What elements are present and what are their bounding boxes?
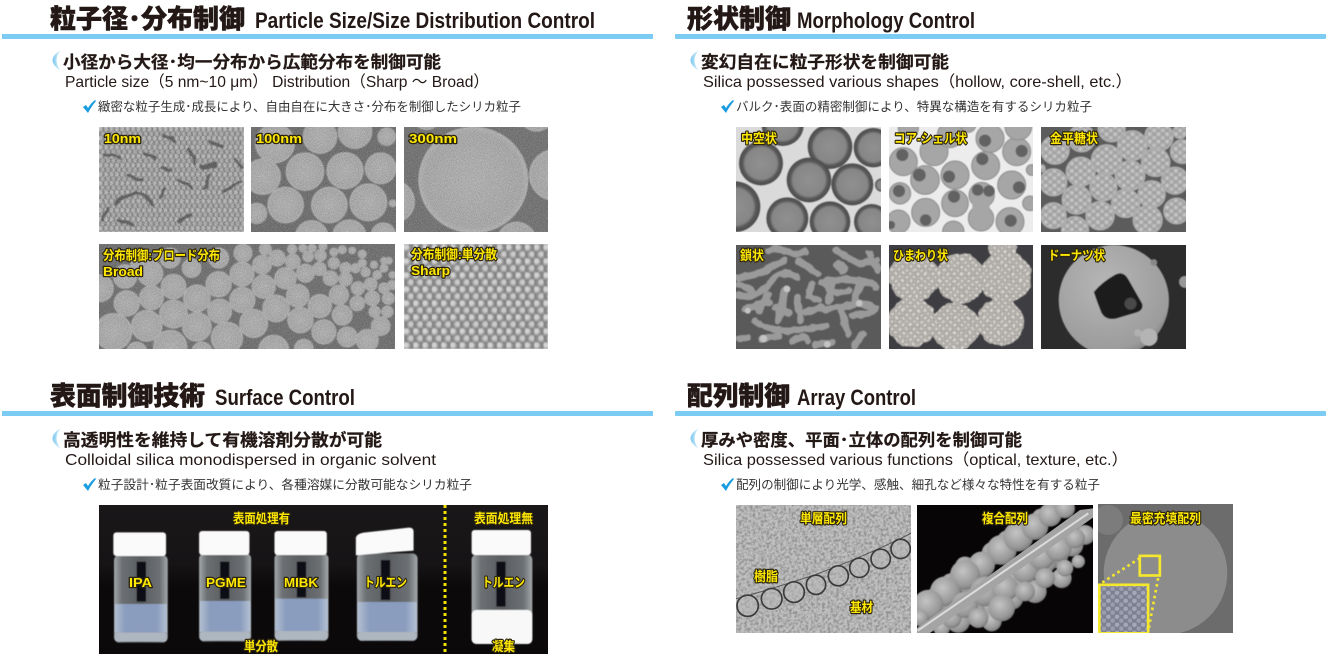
photo: solvent vials: [99, 505, 548, 654]
micrograph: 100nm: [244, 114, 397, 254]
micrograph: 300nm: 300nm: [409, 131, 457, 146]
photo: solvent vials: トルエン: [482, 575, 525, 590]
subheading: array control: 厚みや密度、平面･立体の配列を制御可能: [701, 430, 1022, 450]
micrograph: broad distribution: [87, 242, 397, 365]
micrograph: sunflower: [888, 233, 1033, 351]
check note: surface control: 粒子設計･粒子表面改質により、各種溶媒に分散可能なシリカ粒子: [98, 477, 472, 492]
micrograph: donut: ドーナツ状: [1048, 248, 1105, 263]
photo: solvent vials: トルエン: [364, 575, 407, 590]
micrograph: 300nm: [372, 95, 581, 262]
micrograph: core-shell: コア-シェル状: [894, 131, 967, 146]
micrograph: close-packed array: 最密充填配列: [1130, 511, 1201, 526]
subheading: particle size: [52, 50, 489, 91]
subheading: array control: [690, 428, 1128, 469]
photo: solvent vials: PGME: [206, 575, 246, 590]
micrograph: composite array: 複合配列: [982, 511, 1028, 526]
check note: morphology: バルク･表面の精密制御により、特異な構造を有するシリカ粒子: [736, 99, 1092, 114]
micrograph: chain: [736, 245, 881, 349]
micrograph: sharp distribution: [404, 244, 548, 349]
subheading: particle size: Particle size（5 nm~10 μm） Distribution（Sharp ～ Broad）: [65, 73, 489, 91]
panel: surface control: [2, 381, 653, 654]
heading: array control: Array Control: [797, 385, 916, 410]
heading: morphology: [675, 4, 1326, 39]
heading: surface control: [2, 381, 653, 416]
photo: solvent vials: IPA: [129, 575, 153, 590]
divider: dotted line: [444, 505, 446, 654]
subheading: surface control: Colloidal silica monodispersed in organic solvent: [65, 452, 437, 469]
micrograph: 10nm: [99, 127, 244, 232]
micrograph: 100nm: 100nm: [256, 131, 302, 146]
subheading: surface control: 高透明性を維持して有機溶剤分散が可能: [63, 430, 382, 450]
subheading: morphology: 変幻自在に粒子形状を制御可能: [701, 52, 949, 72]
micrograph: monolayer array: [736, 505, 911, 633]
photo: solvent vials: 表面処理有: [233, 511, 290, 526]
micrograph: sharp distribution: 分布制御:単分散: [411, 247, 497, 262]
heading: surface control: 表面制御技術: [50, 381, 205, 411]
micrograph: monolayer array: 単層配列: [800, 511, 847, 526]
photo: solvent vials: 凝集: [492, 639, 515, 654]
heading: array control: [675, 381, 1326, 416]
subheading: morphology: Silica possessed various shapes（hollow, core-shell, etc.）: [703, 73, 1132, 91]
subheading: array control: Silica possessed various functions（optical, texture, etc.）: [703, 451, 1128, 469]
micrograph: sharp distribution: Sharp: [411, 263, 450, 278]
heading: surface control: Surface Control: [215, 385, 355, 410]
subheading: particle size: 小径から大径･均一分布から広範分布を制御可能: [63, 52, 441, 72]
micrograph: konpeito: [1038, 115, 1194, 243]
heading: particle size: 粒子径･分布制御: [50, 4, 245, 34]
micrograph: core-shell: [887, 113, 1037, 242]
heading: array control: 配列制御: [687, 381, 790, 411]
micrograph: broad distribution: Broad: [103, 264, 143, 279]
micrograph: broad distribution: 分布制御:ブロード分布: [103, 248, 220, 263]
photo: solvent vials: 表面処理無: [474, 511, 533, 526]
photo: solvent vials: 単分散: [244, 639, 278, 654]
panel: array control: [675, 381, 1326, 636]
micrograph: donut: [1041, 245, 1191, 356]
micrograph: hollow: [710, 104, 893, 242]
photo: solvent vials: MIBK: [284, 575, 319, 590]
micrograph: monolayer array: 基材: [850, 600, 873, 615]
check note: array control: 配列の制御により光学、感触、細孔など様々な特性を有する粒子: [736, 477, 1100, 492]
micrograph: close-packed array: [1093, 504, 1233, 635]
heading: morphology: 形状制御: [687, 4, 791, 34]
subheading: morphology: [690, 50, 1132, 91]
micrograph: composite array: [912, 498, 1095, 636]
heading: morphology: Morphology Control: [797, 8, 975, 33]
micrograph: chain: 鎖状: [740, 248, 764, 263]
check note: particle size: 緻密な粒子生成･成長により、自由自在に大きさ･分布を制御したシリカ粒子: [98, 99, 521, 114]
heading: particle size: Particle Size/Size Distribution Control: [255, 8, 595, 33]
micrograph: hollow: 中空状: [741, 131, 777, 146]
heading: particle size: [2, 4, 653, 39]
micrograph: konpeito: 金平糖状: [1050, 131, 1098, 146]
panel: morphology control: [675, 4, 1326, 356]
micrograph: 10nm: 10nm: [104, 131, 141, 146]
subheading: surface control: [52, 428, 437, 469]
micrograph: monolayer array: 樹脂: [754, 569, 778, 584]
micrograph: sunflower: ひまわり状: [893, 248, 948, 263]
panel: particle size and distribution control: [2, 4, 653, 365]
